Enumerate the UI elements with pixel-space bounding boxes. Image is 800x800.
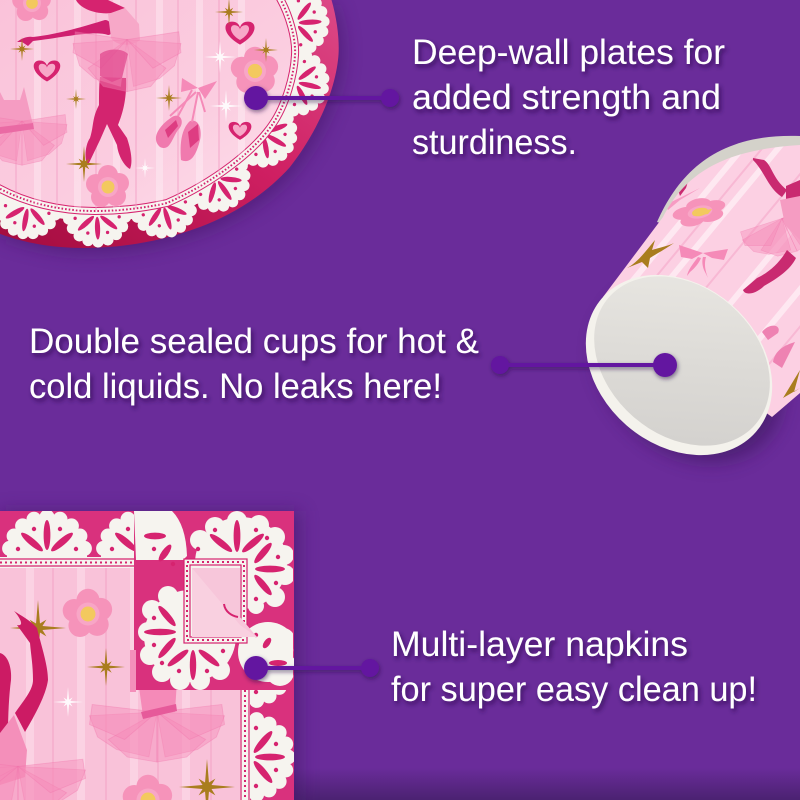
text: plates: Deep-wall plates for xyxy=(412,33,725,72)
ballerina on cup xyxy=(739,158,800,293)
callout: cup xyxy=(491,353,677,377)
plate centre xyxy=(0,0,295,211)
text: napkins xyxy=(391,625,757,709)
text: plates: added strength and xyxy=(412,78,721,117)
plate lace border xyxy=(0,0,336,249)
plate rim xyxy=(0,0,339,248)
fold rosette: lower right xyxy=(238,622,298,686)
fold rosette: top right xyxy=(190,511,295,614)
plate artwork xyxy=(0,0,278,210)
bow on cup xyxy=(679,245,728,278)
callout: napkin xyxy=(244,656,379,680)
napkin centre panel xyxy=(0,568,240,800)
text: cups: cold liquids. No leaks here! xyxy=(29,367,442,406)
fold square frame xyxy=(130,559,257,692)
text: napkins: Multi-layer napkins xyxy=(391,625,688,664)
callout: plate xyxy=(244,86,399,110)
fold scallop: top left xyxy=(134,511,187,566)
napkin body xyxy=(0,511,294,800)
cup base xyxy=(550,238,800,492)
napkin folded corner xyxy=(134,511,298,690)
napkin product photo xyxy=(0,510,300,800)
cup rim xyxy=(657,136,800,225)
text: cups: Double sealed cups for hot & xyxy=(29,322,479,361)
fold rosette: lower left xyxy=(138,586,236,690)
plate product photo xyxy=(0,0,344,253)
text: plates: sturdiness. xyxy=(412,123,577,162)
cup artwork xyxy=(625,140,800,398)
napkin top lace xyxy=(0,511,134,568)
skirt on napkin xyxy=(89,690,225,762)
text: cups xyxy=(29,322,479,406)
ballerina on plate xyxy=(17,0,181,169)
cup product photo xyxy=(586,136,800,468)
tutu dress on plate xyxy=(0,87,67,165)
text: napkins: for super easy clean up! xyxy=(391,670,757,709)
napkin right lace xyxy=(240,648,294,800)
text: plates xyxy=(412,33,725,162)
cup body xyxy=(603,145,800,417)
ballet shoes on plate xyxy=(156,78,217,161)
ballerina on napkin xyxy=(0,611,86,800)
